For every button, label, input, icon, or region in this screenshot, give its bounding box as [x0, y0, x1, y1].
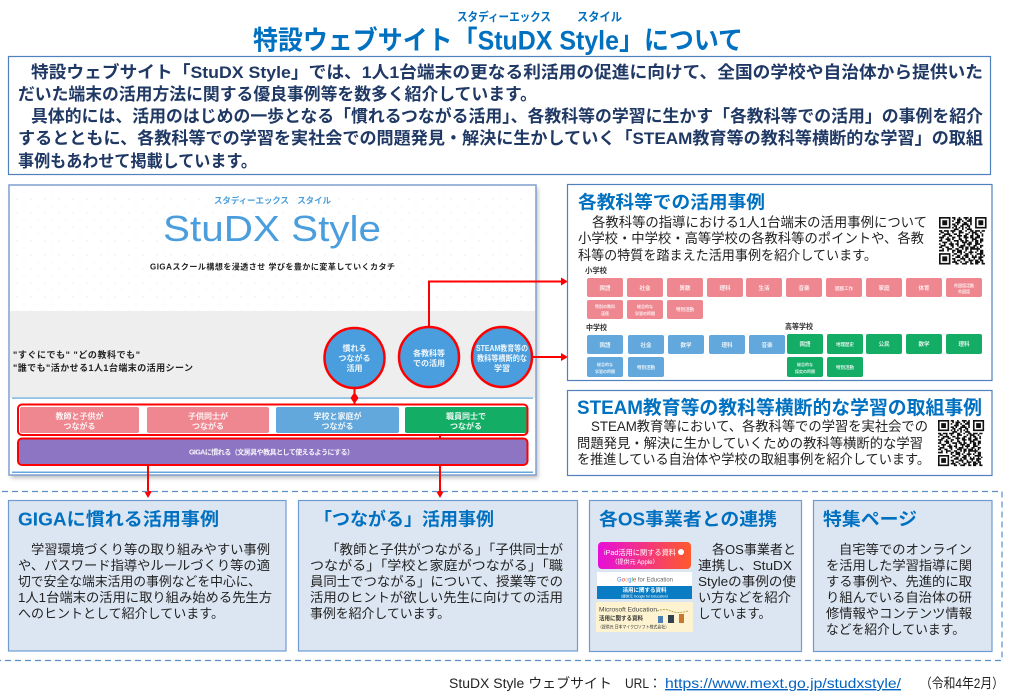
blue junior-high subject buttons: 理科 [721, 341, 733, 349]
footer: website URL and date [449, 675, 1004, 691]
panel: 「つながる」活用事例 [298, 500, 578, 651]
body text: 員同士でつながる」について、授業等での [310, 574, 563, 589]
panel: StuDX Style website screenshot [9, 185, 538, 478]
green high-school subject buttons: 国語 [799, 341, 811, 348]
bar: 学校と家庭がつながる: 学校と家庭が [314, 411, 362, 421]
circle: STEAM教育等の教科等横断的な学習 [472, 327, 532, 387]
banner: iPad: iPad活用に関する資料 [604, 547, 676, 557]
pink elementary subject buttons: 社会 [639, 284, 651, 292]
bar: 子供同士がつながる: 子供同士が [188, 411, 228, 421]
blue junior-high subject buttons: 音楽 [761, 341, 773, 349]
pink elementary subject buttons: 国語 [599, 285, 611, 292]
bar: 教師と子供がつながる: つながる [64, 421, 96, 431]
banner: Google for Education: （提供元 Google for Education） [619, 594, 670, 598]
green high-school subject buttons: 公民 [878, 340, 890, 348]
body text: を推進している自治体や学校の取組事例を紹介しています。 [577, 452, 930, 467]
body text [310, 542, 563, 621]
body text: STEAM教育等において、各教科等での学習を実社会での [591, 418, 928, 434]
body text [698, 542, 796, 621]
heading: 「つながる」活用事例 [314, 508, 494, 530]
pink elementary subject buttons: 理科 [719, 284, 731, 292]
banner: Microsoft Education: Microsoft Education [599, 606, 657, 614]
title: 特設ウェブサイト「StuDX Style」について [253, 26, 743, 56]
blue junior-high subject buttons [587, 335, 785, 377]
banner: Google for Education [597, 572, 692, 599]
green high-school subject buttons: 特別活動 [836, 364, 854, 371]
label: 中学校: 中学校 [586, 322, 607, 332]
body text: つながる」「学校と家庭がつながる」「職 [310, 558, 563, 573]
body text: 学習環境づくり等の取り組みやすい事例 [31, 542, 270, 557]
pink elementary subject buttons: 外国語 [958, 288, 970, 294]
body text [826, 542, 972, 637]
panel: introduction: 事例もあわせて掲載しています。 [18, 152, 257, 171]
pink elementary subject buttons: 体育 [918, 284, 930, 292]
body text: 連携し、StuDX [698, 558, 792, 573]
blue junior-high subject buttons: 総合的な [597, 361, 613, 367]
body text [577, 418, 930, 467]
panel: introduction: だいた端末の活用方法に関する優良事例等を数多く紹介しています。 [18, 84, 537, 104]
footer: website URL and date: URL： [625, 676, 661, 691]
bar: 教師と子供がつながる [20, 407, 139, 433]
pink elementary subject buttons: 学習の時間 [635, 310, 655, 316]
heading: 各教科等での活用事例 [578, 192, 765, 212]
bar: 子供同士がつながる: つながる [192, 421, 224, 431]
body text: 自宅等でのオンライン [839, 542, 972, 557]
screenshot usage-scene text [13, 349, 193, 373]
panel: 各教科等での活用事例 [568, 184, 992, 380]
panel: GIGAに慣れる活用事例 [8, 500, 286, 651]
body text: 修情報やコンテンツ情報 [826, 606, 972, 621]
green high-school subject buttons: 数学 [918, 340, 930, 348]
bar: 学校と家庭がつながる [276, 407, 399, 433]
pink elementary subject buttons: 総合的な [637, 303, 653, 309]
body text: しています。 [698, 606, 771, 621]
title ruby: スタディーエックス スタイル: スタディーエックス [457, 9, 551, 24]
bar: 職員同士でつながる: つながる [450, 421, 482, 431]
label: 小学校: 小学校 [585, 265, 607, 275]
blue junior-high subject buttons: 国語 [599, 342, 611, 349]
body text: Styleの事例の使 [698, 574, 796, 589]
circle: 各教科等での活用 [399, 327, 459, 387]
green high-school subject buttons [787, 334, 982, 377]
panel: 特集ページ [814, 500, 992, 652]
body text: 1人1台端末の活用に取り組み始める先生方 [18, 590, 272, 605]
green high-school subject buttons: 地理歴史 [836, 341, 854, 348]
circle: 慣れるつながる活用: つながる [338, 353, 370, 363]
arrow: 各教科等 circle to subject panel [429, 278, 568, 327]
QR code [938, 420, 984, 466]
banner: iPad: （提供元 Apple） [611, 558, 659, 566]
bar: GIGAに慣れる: GIGAに慣れる（文房具や教具として使えるようにする） [189, 448, 354, 456]
banner: Google for Education: 活用に関する資料 [622, 586, 667, 594]
pink elementary subject buttons: 特別活動 [676, 306, 694, 313]
label: 高等学校: 高等学校 [785, 321, 813, 331]
footer: website URL and date: StuDX Style ウェブサイト [449, 675, 612, 691]
blue junior-high subject buttons: 数学 [680, 341, 692, 349]
pink elementary subject buttons: 外国語活動 [954, 282, 974, 288]
blue junior-high subject buttons: 社会 [640, 341, 652, 349]
pink elementary subject buttons: 家庭 [878, 284, 890, 292]
red outline around connect bars [18, 404, 528, 435]
green high-school subject buttons: 総合的な [797, 361, 813, 367]
bar: 職員同士でつながる [405, 407, 527, 433]
pink elementary subject buttons: 算数 [679, 284, 691, 292]
panel: introduction [8, 56, 990, 174]
circle: 慣れるつながる活用: 慣れる [342, 343, 366, 353]
dashed frame around lower panels [0, 492, 1002, 660]
circle: 各教科等での活用: 各教科等 [413, 348, 445, 358]
screenshot tagline: GIGAスクール構想を浸透させ 学びを豊かに変革していくカタチ [150, 262, 395, 272]
heading: GIGAに慣れる活用事例 [18, 510, 219, 530]
bar: 学校と家庭がつながる: つながる [322, 421, 354, 431]
body text: 小学校・中学校・高等学校の各教科等のポイントや、各教 [578, 230, 924, 246]
green high-school subject buttons: 探究の時間 [795, 368, 815, 374]
pink elementary subject buttons [587, 278, 982, 319]
pink elementary subject buttons: 特別の教科 [595, 303, 615, 309]
body text: へのヒントとして紹介しています。 [18, 606, 224, 621]
body text: などを紹介しています。 [826, 622, 965, 637]
panel: introduction: 具体的には、活用のはじめの一歩となる「慣れるつながる活用」、各教科等の学習に生かす「各教科等での活用」の事例を紹介 [31, 106, 983, 126]
panel: 各OS事業者との連携 [590, 500, 802, 652]
body text: 問題発見・解決に生かしていくための教科等横断的な学習 [577, 435, 923, 451]
body text: 切で安全な端末活用の事例などを中心に、 [18, 574, 261, 589]
body text: を活用した学習指導に関 [826, 558, 972, 573]
QR code [939, 217, 987, 265]
heading: STEAM教育等の教科等横断的な学習の取組事例 [577, 396, 982, 419]
panel: introduction: 特設ウェブサイト「StuDX Style」では、1人1台端末の更なる利活用の促進に向けて、全国の学校や自治体から提供いた [31, 62, 983, 82]
banner: Microsoft Education: （提供元 日本マイクロソフト株式会社） [598, 624, 669, 630]
body text: 事例を紹介しています。 [310, 606, 450, 621]
banner: iPad [598, 542, 691, 569]
banner: Microsoft Education [596, 602, 693, 632]
body text: 「教師と子供がつながる」「子供同士が [326, 542, 563, 557]
body text: り組んでいる自治体の研 [826, 590, 972, 605]
bar: 職員同士でつながる: 職員同士で [446, 411, 486, 421]
circle: STEAM教育等の教科等横断的な学習: 教科等横断的な [477, 353, 527, 363]
body text: 科等の特質を踏まえた活用事例を紹介しています。 [578, 247, 877, 263]
body text: 各教科等の指導における1人1台端末の活用事例について [592, 214, 927, 230]
body text: 活用のヒントが欲しい先生に向けての活用 [310, 590, 563, 605]
connect bars group [18, 404, 528, 435]
body text: い方などを紹介 [698, 590, 791, 605]
arrow: STEAM circle to STEAM panel [532, 353, 568, 361]
heading: 各OS事業者との連携 [599, 508, 777, 530]
body text: する事例や、先進的に取 [826, 574, 972, 589]
title ruby: スタディーエックス スタイル: スタイル [577, 10, 622, 24]
screenshot kana subtitle: スタディーエックス スタイル [214, 196, 331, 206]
circle: 慣れるつながる活用 [324, 328, 384, 388]
arrow: 慣れるつながる circle to bars [350, 388, 358, 404]
circle: STEAM教育等の教科等横断的な学習: 学習 [494, 363, 510, 373]
banner: Microsoft Education: 活用に関する資料 [599, 614, 643, 622]
circle: 各教科等での活用: での活用 [413, 358, 445, 368]
screenshot usage-scene text: "すぐにでも" "どの教科でも" [13, 349, 140, 360]
panel: STEAM教育等の教科等横断的な学習の取組事例 [568, 390, 992, 476]
bar: 教師と子供がつながる: 教師と子供が [56, 411, 104, 421]
pink elementary subject buttons: 音楽 [798, 284, 810, 292]
arrow: connect row to つながる panel [436, 435, 444, 498]
body text [578, 214, 927, 263]
circle: 慣れるつながる活用: 活用 [346, 363, 362, 373]
footer: website URL and date: https://www.mext.go.jp/studxstyle/ [665, 675, 901, 691]
title ruby: スタディーエックス スタイル [457, 9, 622, 24]
body text: や、パスワード指導やルールづくり等の適 [18, 558, 270, 573]
circle: STEAM教育等の教科等横断的な学習: STEAM教育等の [476, 343, 528, 353]
panel: introduction: するとともに、各教科等での学習を実社会での問題発見・解決に生かしていく「STEAM教育等の教科等横断的な学習」の取組 [18, 128, 983, 148]
bar: 子供同士がつながる [147, 407, 269, 433]
pink elementary subject buttons: 生活 [758, 284, 770, 292]
green high-school subject buttons: 理科 [958, 340, 970, 348]
banner: Google for Education: Google for Education [617, 576, 673, 584]
bar: GIGAに慣れる [18, 438, 528, 465]
heading: 特集ページ [823, 510, 917, 530]
blue junior-high subject buttons: 特別活動 [637, 364, 655, 371]
arrow: GIGA bar to GIGA panel [144, 465, 152, 498]
body text [18, 542, 272, 621]
pink elementary subject buttons: 道徳 [601, 310, 609, 316]
body text: 各OS事業者と [712, 542, 796, 557]
screenshot usage-scene text: "誰でも"活かせる1人1台端末の活用シーン [13, 362, 193, 373]
blue junior-high subject buttons: 学習の時間 [595, 368, 615, 374]
pink elementary subject buttons: 図画工作 [835, 285, 853, 292]
screenshot logo: StuDX Style [163, 208, 381, 249]
